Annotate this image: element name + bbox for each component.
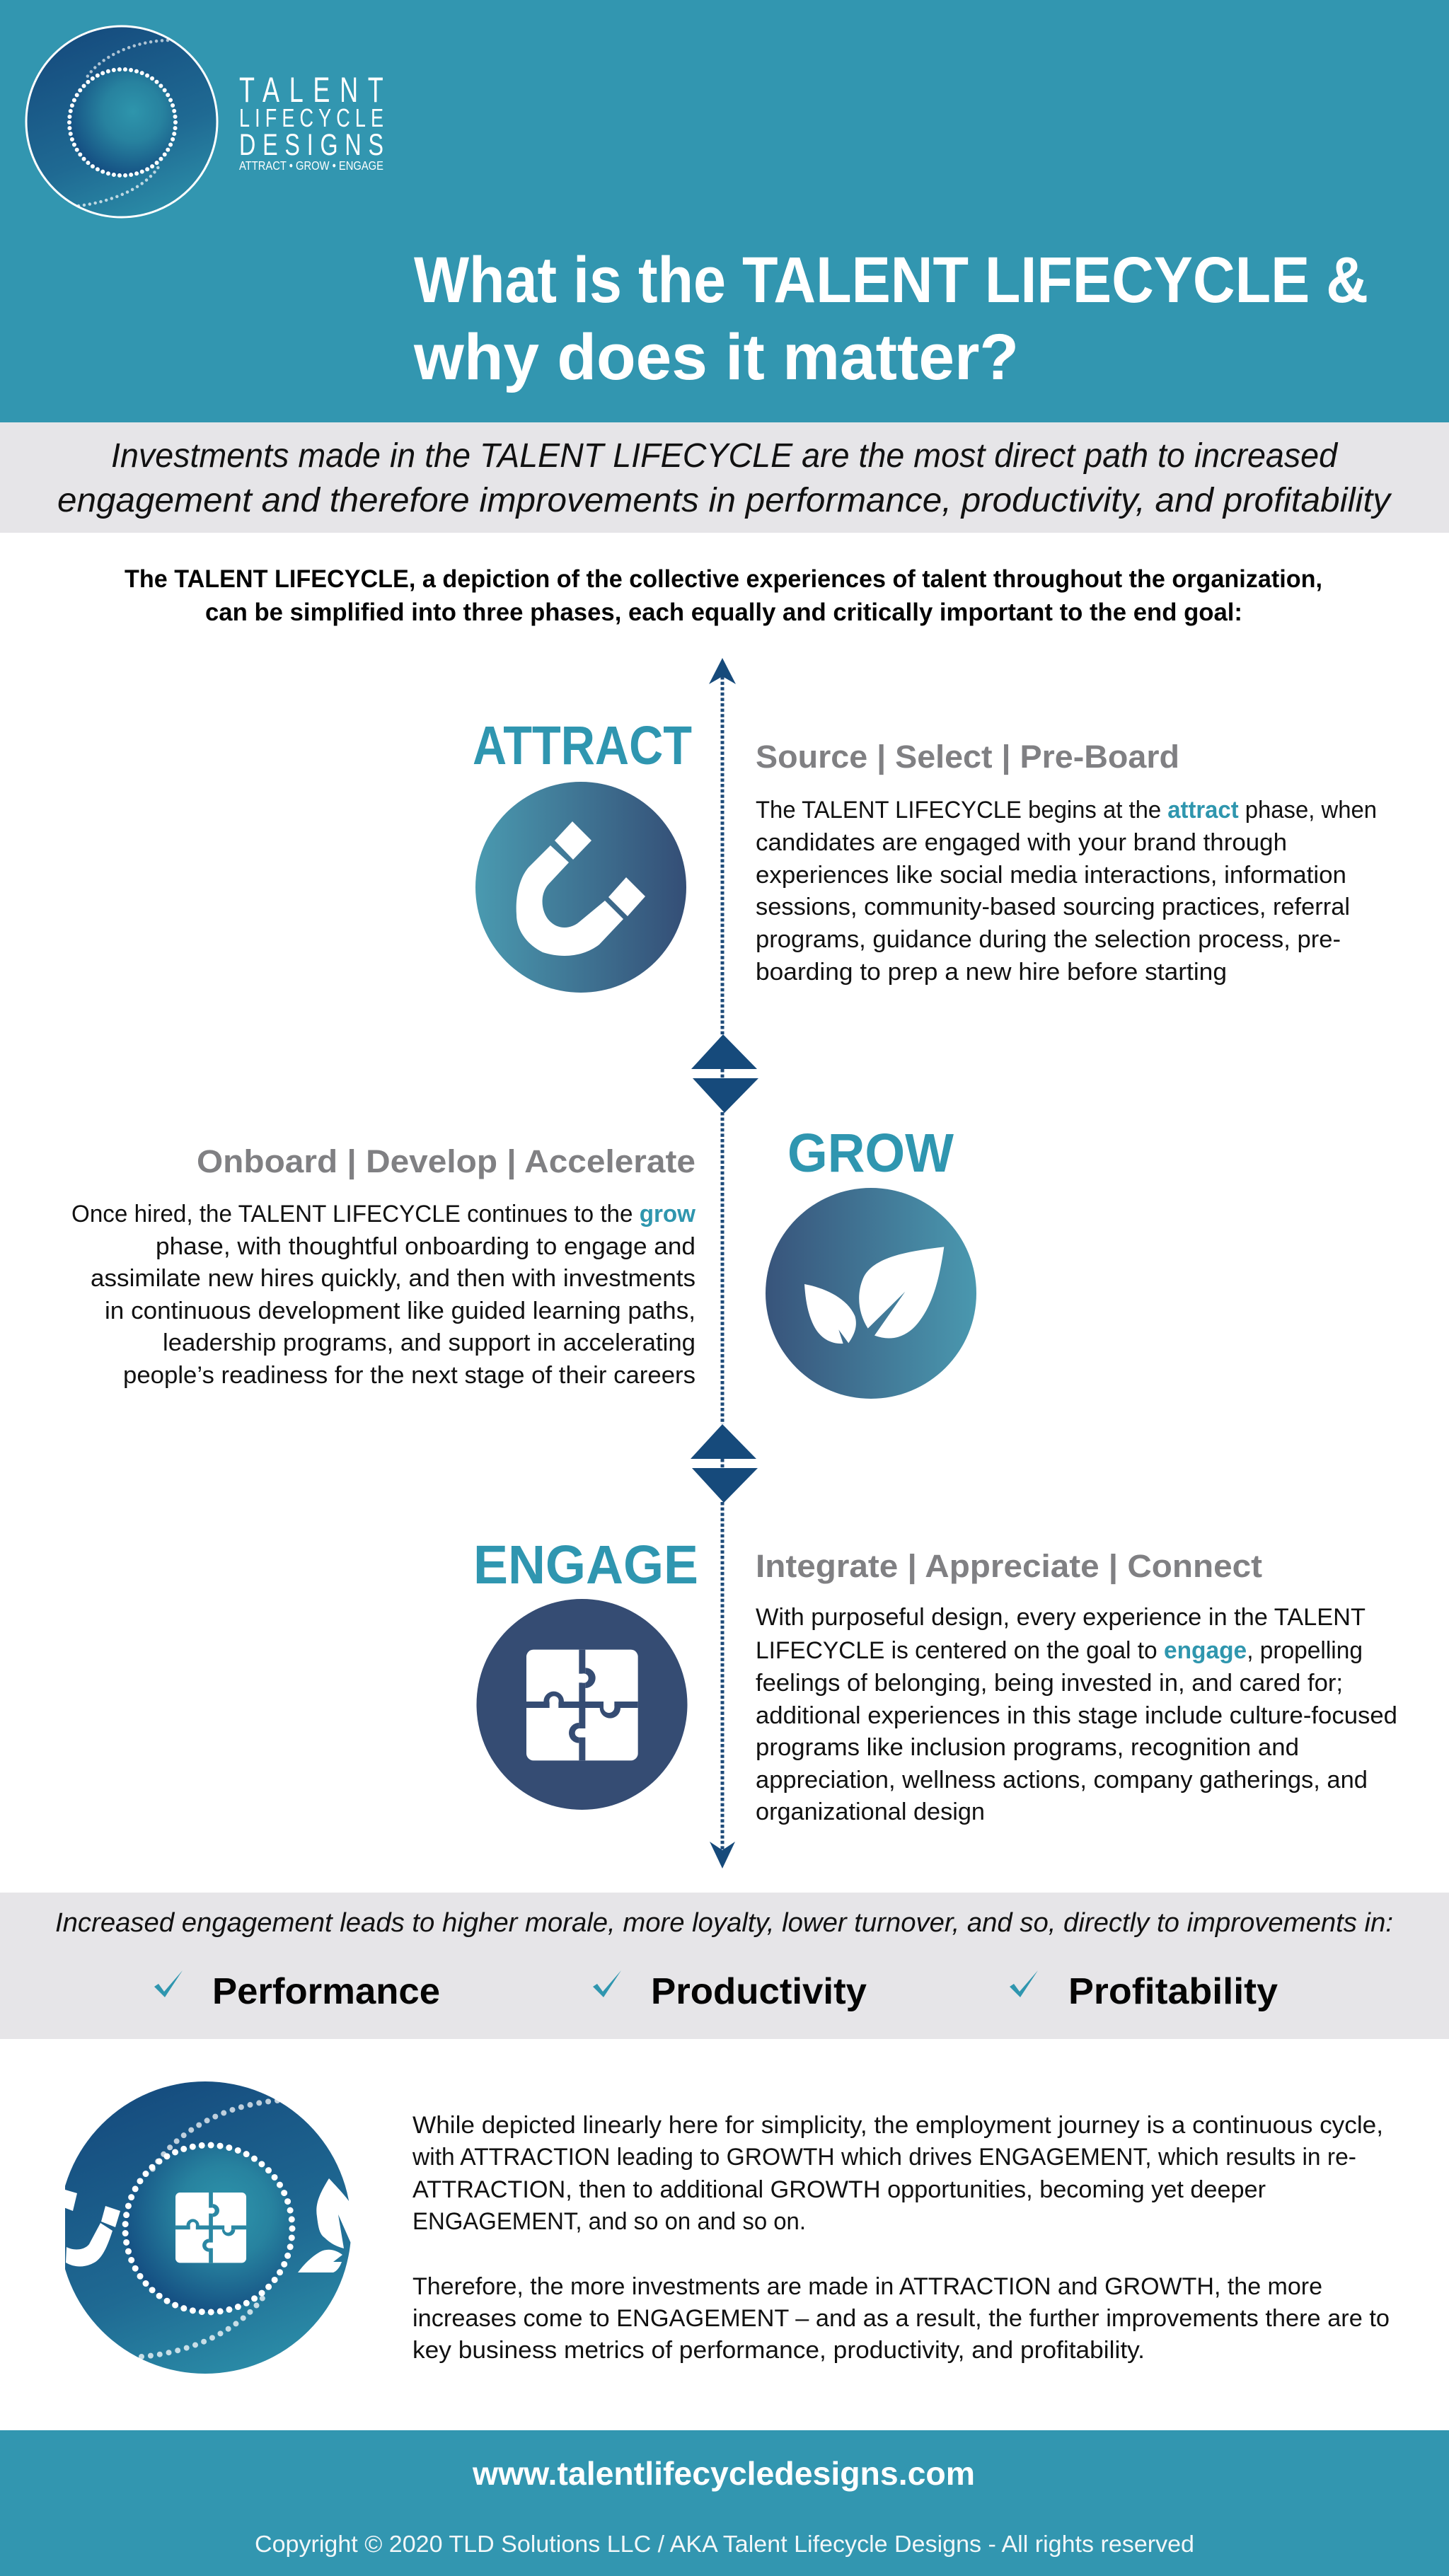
icon: puzzle xyxy=(477,1599,688,1810)
panel: grow xyxy=(71,1123,976,1399)
logo wordmark xyxy=(239,71,383,173)
title: why does it matter? xyxy=(413,321,1019,393)
outcome: performance: Performance xyxy=(212,1971,440,2012)
attract description: experiences like social media interactions, information xyxy=(756,862,1346,889)
intro text: The TALENT LIFECYCLE, a depiction of the collective experiences of talent throughout the organization, xyxy=(125,565,1322,593)
engage subheading: Integrate | Appreciate | Connect xyxy=(756,1548,1262,1585)
closing text: with ATTRACTION leading to GROWTH which drives ENGAGEMENT, which results in re- xyxy=(412,2144,1356,2171)
closing text: ENGAGEMENT, and so on and so on. xyxy=(412,2208,806,2235)
engage description: With purposeful design, every experience in the TALENT xyxy=(756,1604,1366,1631)
intro text: can be simplified into three phases, each equally and critically important to the end goal: xyxy=(205,599,1242,626)
outcomes statement: Increased engagement leads to higher morale, more loyalty, lower turnover, and so, directly to improvements in: xyxy=(55,1908,1393,1938)
engage description: appreciation, wellness actions, company gatherings, and xyxy=(756,1767,1368,1794)
icon: leaves xyxy=(766,1188,976,1399)
attract description: The TALENT LIFECYCLE begins at the attract phase, when xyxy=(756,797,1377,824)
attract description: programs, guidance during the selection process, pre- xyxy=(756,926,1341,953)
title xyxy=(413,244,1368,393)
copyright: Copyright © 2020 TLD Solutions LLC / AKA Talent Lifecycle Designs - All rights reserved xyxy=(255,2531,1194,2557)
footer xyxy=(0,2430,1449,2576)
grow description xyxy=(71,1201,696,1389)
attract description: candidates are engaged with your brand through xyxy=(756,829,1287,856)
logo wordmark: ATTRACT • GROW • ENGAGE xyxy=(239,158,383,173)
logo wordmark: TALENT xyxy=(239,71,383,110)
engage description: feelings of belonging, being invested in, and cared for; xyxy=(756,1670,1343,1697)
icon: lifecycle emblem xyxy=(59,2081,352,2374)
panel: attract xyxy=(473,715,1377,993)
logo xyxy=(26,26,383,217)
grow description: phase, with thoughtful onboarding to engage and xyxy=(156,1233,695,1260)
engage description: organizational design xyxy=(756,1798,985,1825)
attract heading: ATTRACT xyxy=(473,715,692,776)
grow heading: GROW xyxy=(787,1123,954,1184)
logo wordmark: DESIGNS xyxy=(239,129,383,162)
grow description: Once hired, the TALENT LIFECYCLE continues to the grow xyxy=(71,1201,696,1228)
logo emblem xyxy=(26,26,217,217)
closing text: ATTRACTION, then to additional GROWTH opportunities, becoming yet deeper xyxy=(412,2176,1266,2203)
closing text: Therefore, the more investments are made in ATTRACTION and GROWTH, the more xyxy=(412,2273,1322,2300)
engage description xyxy=(756,1604,1397,1825)
panel: investment statement: Investments made in the TALENT LIFECYCLE are the most direct path to increased xyxy=(111,437,1338,475)
panel: outcomes xyxy=(0,1893,1449,2039)
panel: investment statement xyxy=(0,422,1449,533)
closing text: key business metrics of performance, productivity, and profitability. xyxy=(412,2337,1145,2364)
attract description: boarding to prep a new hire before starting xyxy=(756,959,1227,986)
attract description xyxy=(756,797,1377,986)
panel: engage xyxy=(473,1535,1397,1825)
intro text xyxy=(125,565,1322,626)
engage description: additional experiences in this stage include culture-focused xyxy=(756,1702,1397,1729)
website: www.talentlifecycledesigns.com xyxy=(472,2455,975,2492)
engage description: LIFECYCLE is centered on the goal to engage, propelling xyxy=(756,1637,1363,1664)
logo wordmark: LIFECYCLE xyxy=(239,103,383,132)
grow description: assimilate new hires quickly, and then with investments xyxy=(91,1265,695,1292)
header band xyxy=(0,0,1449,422)
closing text: increases come to ENGAGEMENT – and as a result, the further improvements there are to xyxy=(412,2305,1390,2332)
grow description: leadership programs, and support in accelerating xyxy=(163,1329,695,1356)
grow description: people’s readiness for the next stage of their careers xyxy=(123,1362,695,1389)
engage heading: ENGAGE xyxy=(473,1535,698,1595)
grow description: in continuous development like guided learning paths, xyxy=(105,1298,695,1324)
attract description: sessions, community-based sourcing practices, referral xyxy=(756,894,1350,920)
outcome: productivity: Productivity xyxy=(651,1971,867,2012)
timeline arrow xyxy=(691,658,758,1869)
closing text: While depicted linearly here for simplicity, the employment journey is a continuous cycle, xyxy=(412,2112,1383,2139)
outcome: profitability: Profitability xyxy=(1068,1971,1278,2012)
attract subheading: Source | Select | Pre-Board xyxy=(756,739,1179,775)
closing text xyxy=(412,2112,1390,2364)
engage description: programs like inclusion programs, recognition and xyxy=(756,1734,1299,1761)
panel: investment statement: engagement and therefore improvements in performance, productivity, and profitability xyxy=(57,482,1392,519)
title: What is the TALENT LIFECYCLE & xyxy=(414,244,1368,316)
grow subheading: Onboard | Develop | Accelerate xyxy=(197,1143,695,1180)
icon: magnet xyxy=(475,782,686,993)
